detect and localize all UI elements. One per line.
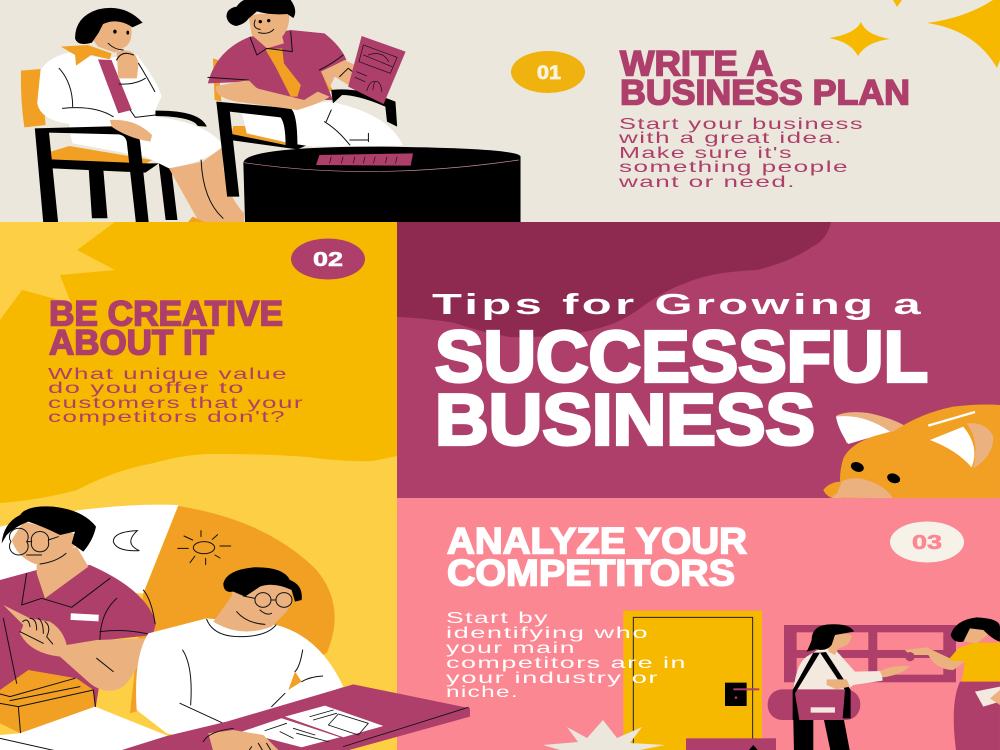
illustration: door and key handover [623,611,1000,750]
text: be creative body: customers that your [48,395,304,412]
text: write a business plan body: want or need. [617,174,796,191]
panel: be creative about it [0,222,397,512]
badge 01: 01 [537,63,561,84]
door [623,611,762,750]
box and star [686,738,776,750]
text: analyze body: Start by [446,610,549,627]
decorative burst [0,222,115,320]
text: analyze body: competitors are in [446,655,687,672]
heading: write a business plan: WRITE A [620,44,773,84]
window [784,625,956,682]
heading: be creative about it [49,294,283,362]
heading: be creative about it: BE CREATIVE [49,294,283,334]
heading: analyze your competitors: ANALYZE YOUR [447,520,747,562]
title: successful business: SUCCESSFUL [435,318,928,398]
panel: lower left illustration [0,454,470,750]
badge 03 [890,522,964,562]
text: analyze body: niche. [446,684,519,701]
heading: write a business plan [620,44,910,112]
illustration: two people seated at a table [21,0,521,223]
person with bag receiving keys [768,624,910,750]
title: tips for growing a: Tips for Growing a [432,289,924,321]
text: write a business plan body: with a great idea. [617,130,843,147]
person handing keys [905,617,1000,750]
text: be creative body: What unique value [48,366,288,383]
moon and sun backdrop [0,505,335,713]
text: write a business plan body [617,116,864,191]
text: analyze body: your main [446,640,576,657]
badge 02: 02 [313,249,343,271]
heading: be creative about it: ABOUT IT [49,324,214,362]
panel: analyze your competitors [397,498,1000,750]
text: analyze body: identifying who [446,625,649,642]
heading: analyze your competitors: COMPETITORS [447,552,735,594]
title: successful business: BUSINESS [435,380,815,460]
decorative burst [543,720,665,750]
man pointing in maroon shirt [0,506,170,750]
man in maroon shirt on chair [208,0,406,197]
text: be creative body: competitors don't? [48,409,286,426]
text: write a business plan body: Start your business [619,116,864,133]
man with glasses in white sweater [136,567,343,742]
badge 02 [291,238,365,280]
text: be creative body: do you offer to [48,380,245,397]
heading: analyze your competitors [447,520,747,594]
panel: title [397,222,1000,499]
text: write a business plan body: something people [619,159,849,176]
badge 01 [511,51,585,93]
text: be creative body [48,366,304,426]
badge 03: 03 [912,532,942,554]
text: analyze body [446,610,687,701]
text: analyze body: your industry or [446,670,659,687]
table with papers [117,684,470,750]
icon: piggy bank [823,404,1000,498]
text: write a business plan body: Make sure it's [619,145,793,162]
title: successful business [435,318,928,460]
panel: write a business plan [0,0,1000,223]
icon: sparkle stars [829,0,1000,68]
heading: write a business plan: BUSINESS PLAN [620,74,910,112]
table with card [243,147,521,223]
woman in white coat on chair [21,8,244,223]
